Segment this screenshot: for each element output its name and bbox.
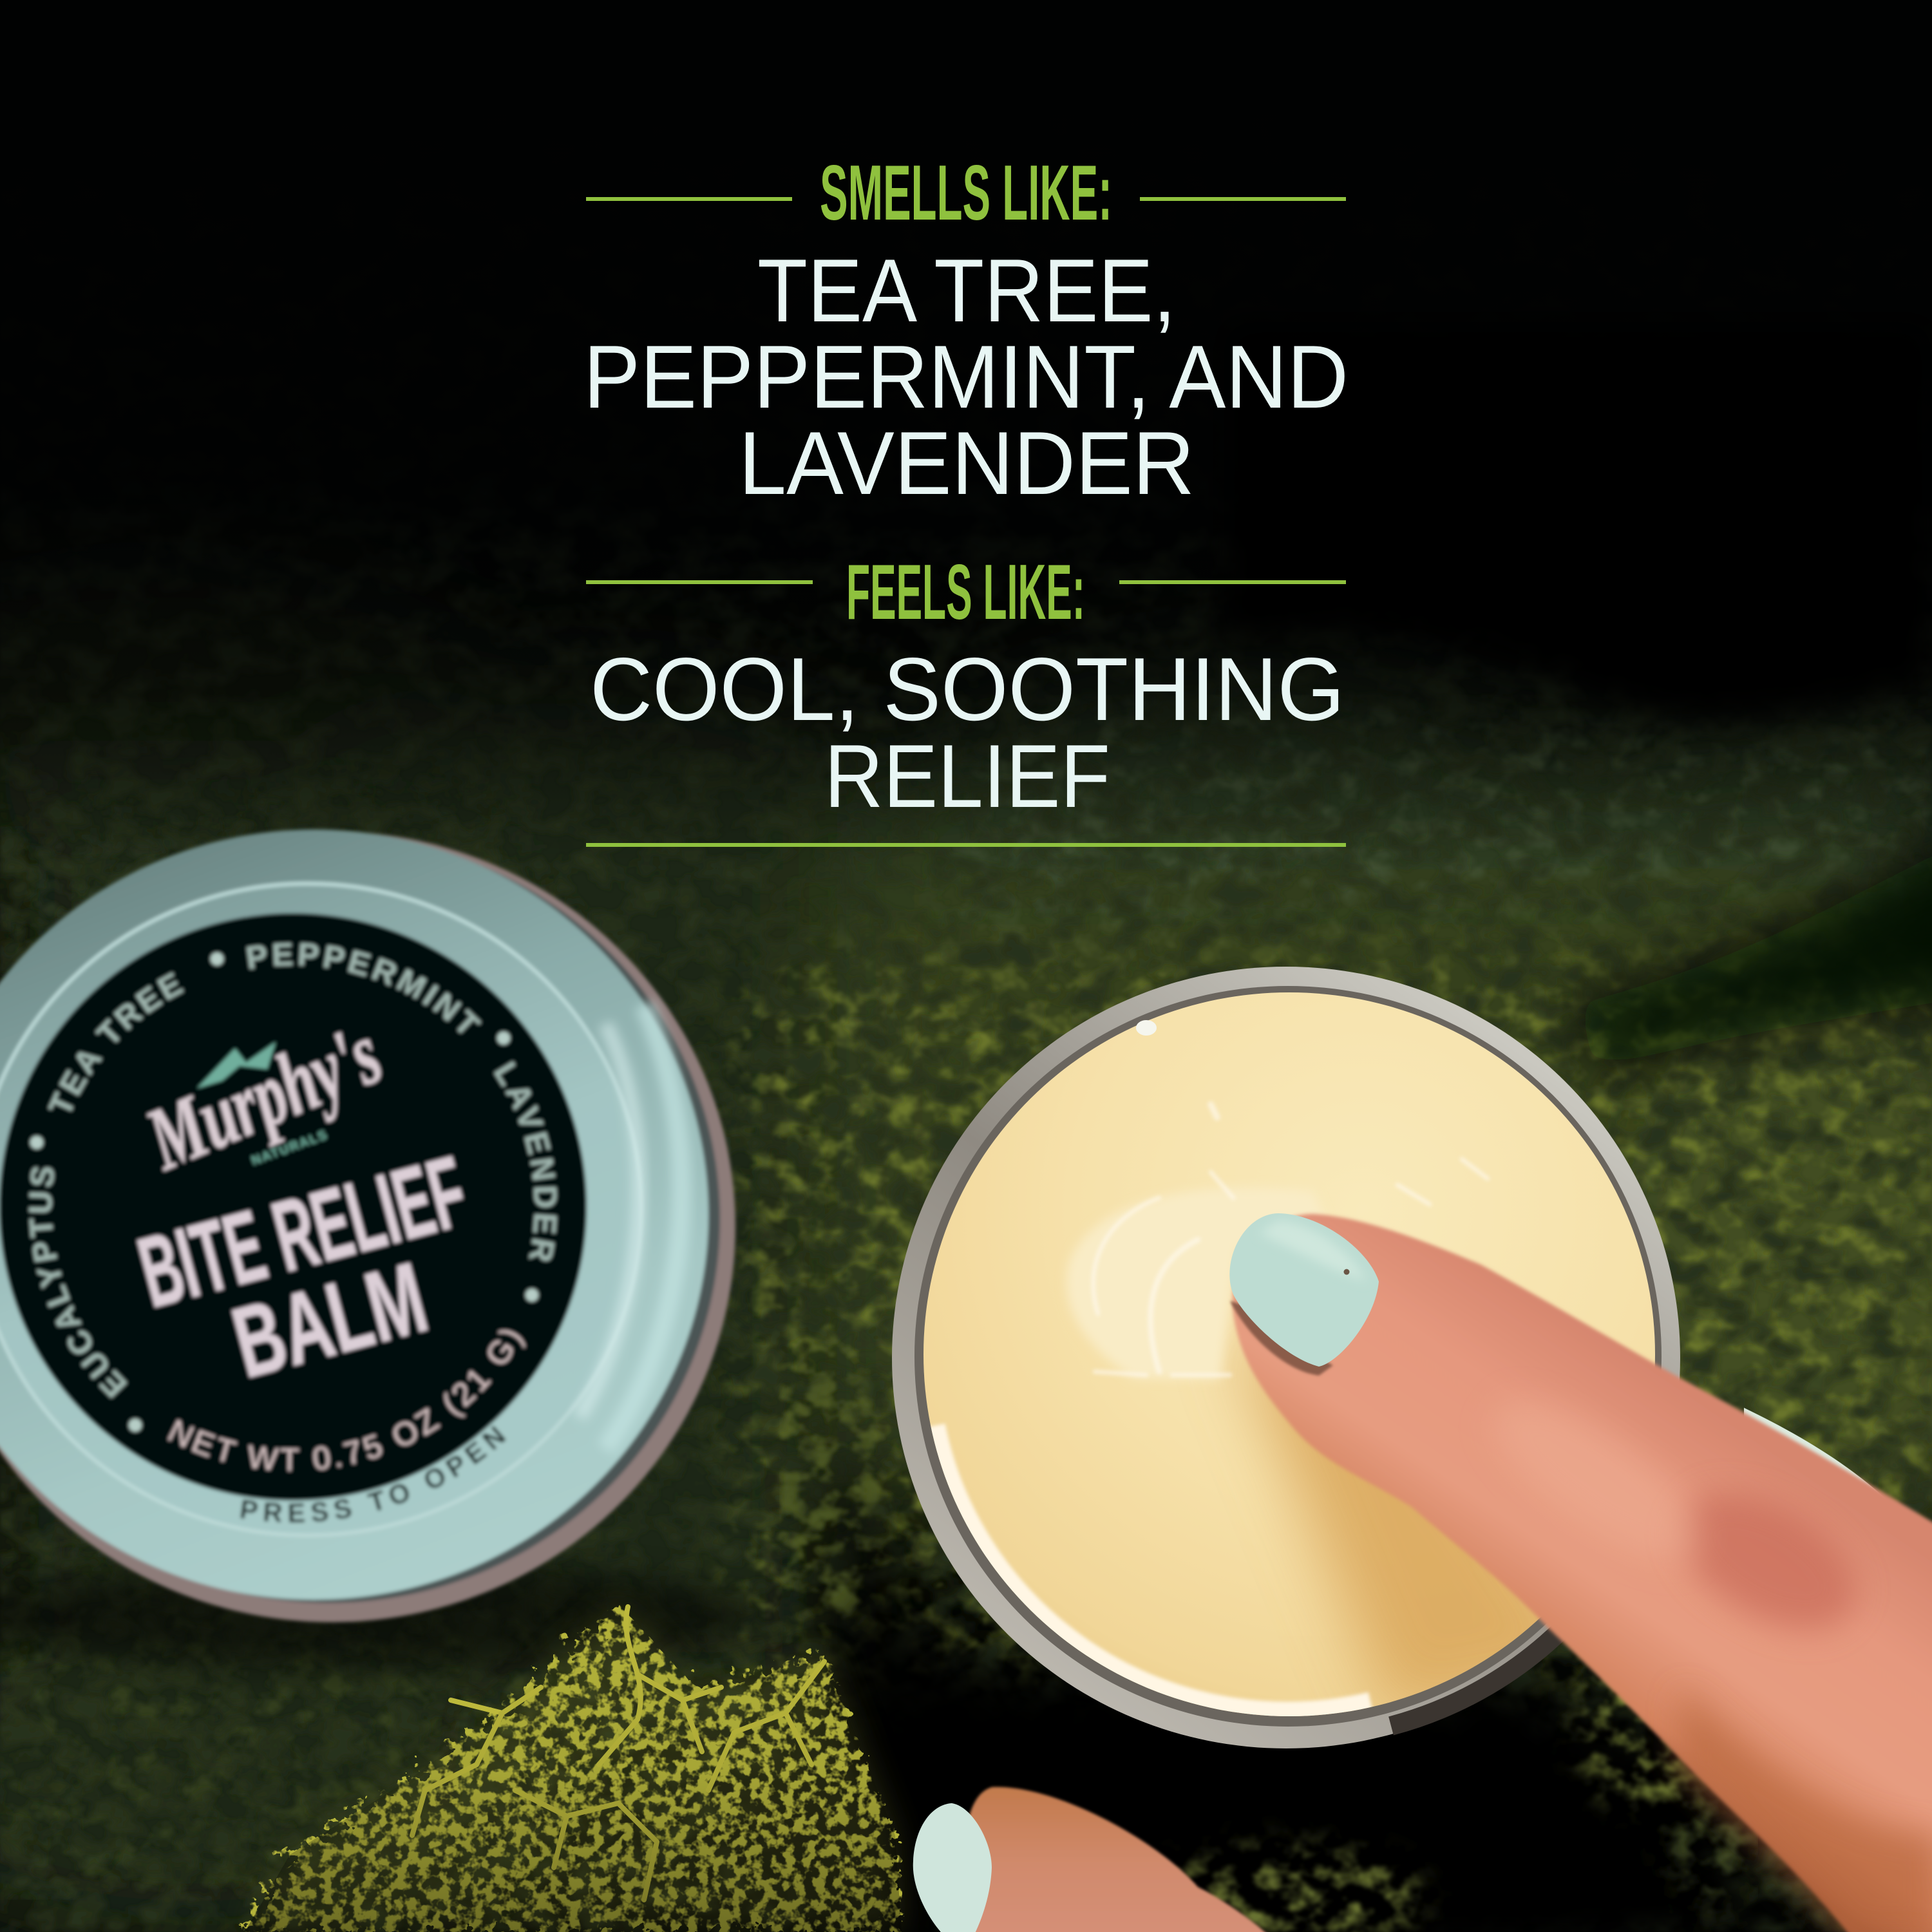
- product name: BITE RELIEF: [128, 1135, 478, 1329]
- lichen clump: [245, 1604, 902, 1932]
- feels like copy: [590, 639, 1345, 826]
- moss patches in shadow: [779, 1340, 1758, 1932]
- thumb nail: [913, 1803, 992, 1932]
- label dots: [30, 952, 538, 1432]
- lid metal edge: [0, 831, 735, 1622]
- smells like heading: SMELLS LIKE:: [820, 149, 1112, 236]
- smells like copy: PEPPERMINT, AND: [583, 327, 1349, 427]
- closing rule: [586, 843, 1346, 847]
- feels like copy: COOL, SOOTHING: [590, 639, 1345, 739]
- knuckle highlight: [1471, 1374, 1723, 1588]
- nail fleck: [1343, 1269, 1350, 1275]
- smells like heading: [586, 149, 1346, 236]
- smells like copy: TEA TREE,: [757, 241, 1176, 341]
- curved ingredients text: TEA TREE: [42, 964, 191, 1121]
- thumb and nail: [913, 1787, 1272, 1932]
- finger shadow on balm: [1229, 1329, 1610, 1719]
- logo mountain: [197, 1042, 276, 1088]
- lid of bite relief balm tin: BALM: [222, 1241, 438, 1400]
- net weight text: NET WT 0.75 OZ (21 G): [163, 1319, 531, 1478]
- balm white crescent: [931, 1426, 1372, 1716]
- dark band right: [1571, 824, 1932, 1069]
- balm surface: [923, 992, 1655, 1716]
- shadow under lid and tin: [721, 1662, 1752, 1932]
- feels like heading: FEELS LIKE:: [846, 548, 1085, 636]
- inner lid ring: [0, 884, 641, 1535]
- balm smear: [1066, 1188, 1327, 1379]
- logo naturals: NATURALS: [250, 1128, 330, 1168]
- knuckle flush: [1657, 1466, 1879, 1658]
- press to open text: PRESS TO OPEN: [238, 1416, 516, 1528]
- smells like copy: LAVENDER: [739, 413, 1195, 513]
- base moss tones: [0, 541, 1932, 1932]
- lichen branches: [412, 1607, 824, 1900]
- curved ingredients text: LAVENDER: [487, 1056, 564, 1268]
- open balm tin: [892, 967, 1680, 1748]
- lit moss texture: [0, 695, 1932, 1900]
- smells like copy: [583, 241, 1349, 513]
- finger body: [1233, 1214, 1932, 1932]
- logo script: Murphy's: [133, 1003, 395, 1189]
- pointing finger: [1229, 1213, 1932, 1932]
- lid blue paint: [0, 829, 708, 1600]
- tin rim: [892, 967, 1680, 1748]
- top darkness: [0, 0, 1932, 869]
- thumb: [964, 1787, 1272, 1932]
- smear streaks: [1094, 1104, 1488, 1375]
- curved ingredients text: EUCALYPTUS: [25, 1163, 130, 1401]
- feels like copy: RELIEF: [824, 726, 1110, 826]
- tin lower rim dark segment: [1391, 1620, 1571, 1726]
- wax fleck: [1136, 1020, 1157, 1036]
- lichen lower shade: [245, 1604, 902, 1932]
- lid of bite relief balm tin: [0, 829, 735, 1622]
- nail highlight: [1259, 1220, 1367, 1282]
- dark swoop upper right: [1224, 322, 1932, 720]
- text panel: [583, 149, 1349, 847]
- skin darker underside: [1681, 1687, 1932, 1932]
- curved ingredients text: PEPPERMINT: [243, 936, 489, 1046]
- curved ingredients text: [23, 936, 564, 1405]
- feels like heading: [586, 548, 1346, 636]
- cuticle shadow: [1230, 1301, 1333, 1376]
- second fingernail behind finger: [1744, 1408, 1909, 1523]
- black label: [0, 913, 587, 1501]
- nail: [1229, 1213, 1379, 1367]
